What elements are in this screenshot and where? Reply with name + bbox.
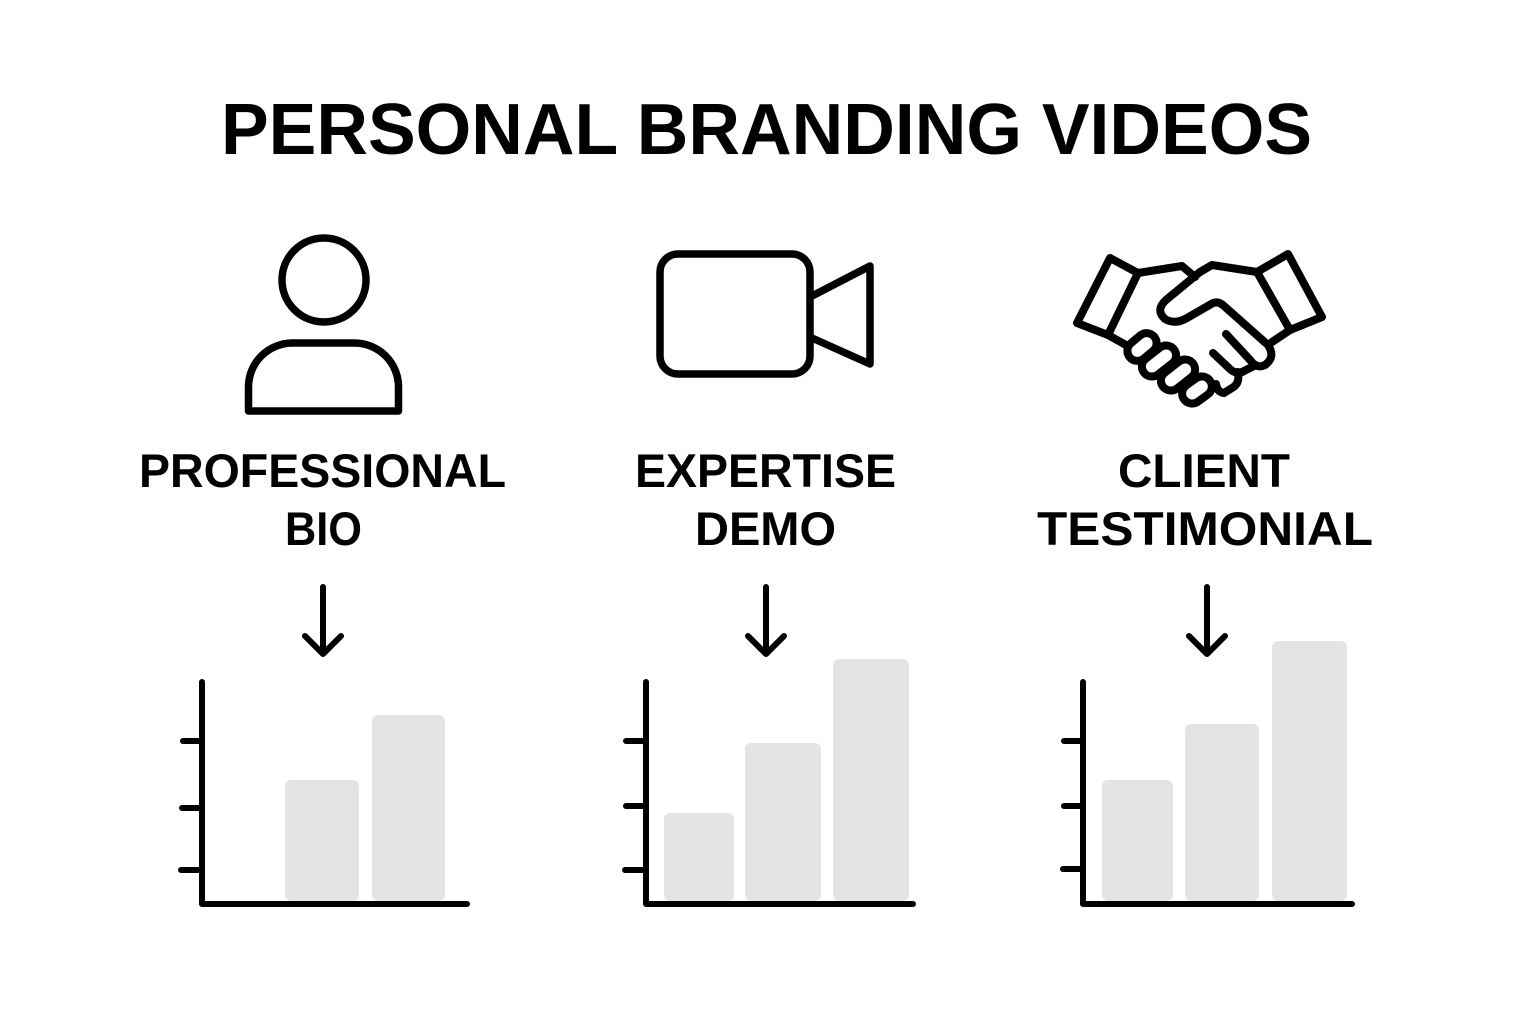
arrow: testimonial to chart: [1189, 587, 1225, 654]
heading: expertise demo: [635, 444, 896, 555]
heading: professional bio: [139, 444, 506, 555]
panel: client testimonial: [1037, 254, 1373, 904]
icon: handshake: [1077, 254, 1322, 407]
bar chart: client testimonial: [1063, 641, 1352, 904]
arrow: demo to chart: [748, 587, 784, 654]
heading: client testimonial: [1037, 444, 1373, 555]
title: PERSONAL BRANDING VIDEOS: [221, 90, 1312, 170]
icon: person: [248, 238, 398, 411]
icon: video camera: [660, 254, 870, 374]
panel: professional bio: [139, 238, 506, 904]
heading: expertise demo: DEMO: [695, 502, 836, 555]
bar chart: professional bio: [181, 682, 467, 904]
heading: professional bio: BIO: [285, 502, 362, 555]
heading: client testimonial: CLIENT: [1118, 444, 1290, 497]
heading: expertise demo: EXPERTISE: [635, 444, 896, 497]
heading: professional bio: PROFESSIONAL: [139, 444, 506, 497]
arrow: bio to chart: [305, 587, 341, 654]
heading: client testimonial: TESTIMONIAL: [1037, 502, 1373, 555]
panel: expertise demo: [625, 254, 913, 904]
bar chart: expertise demo: [625, 659, 913, 904]
